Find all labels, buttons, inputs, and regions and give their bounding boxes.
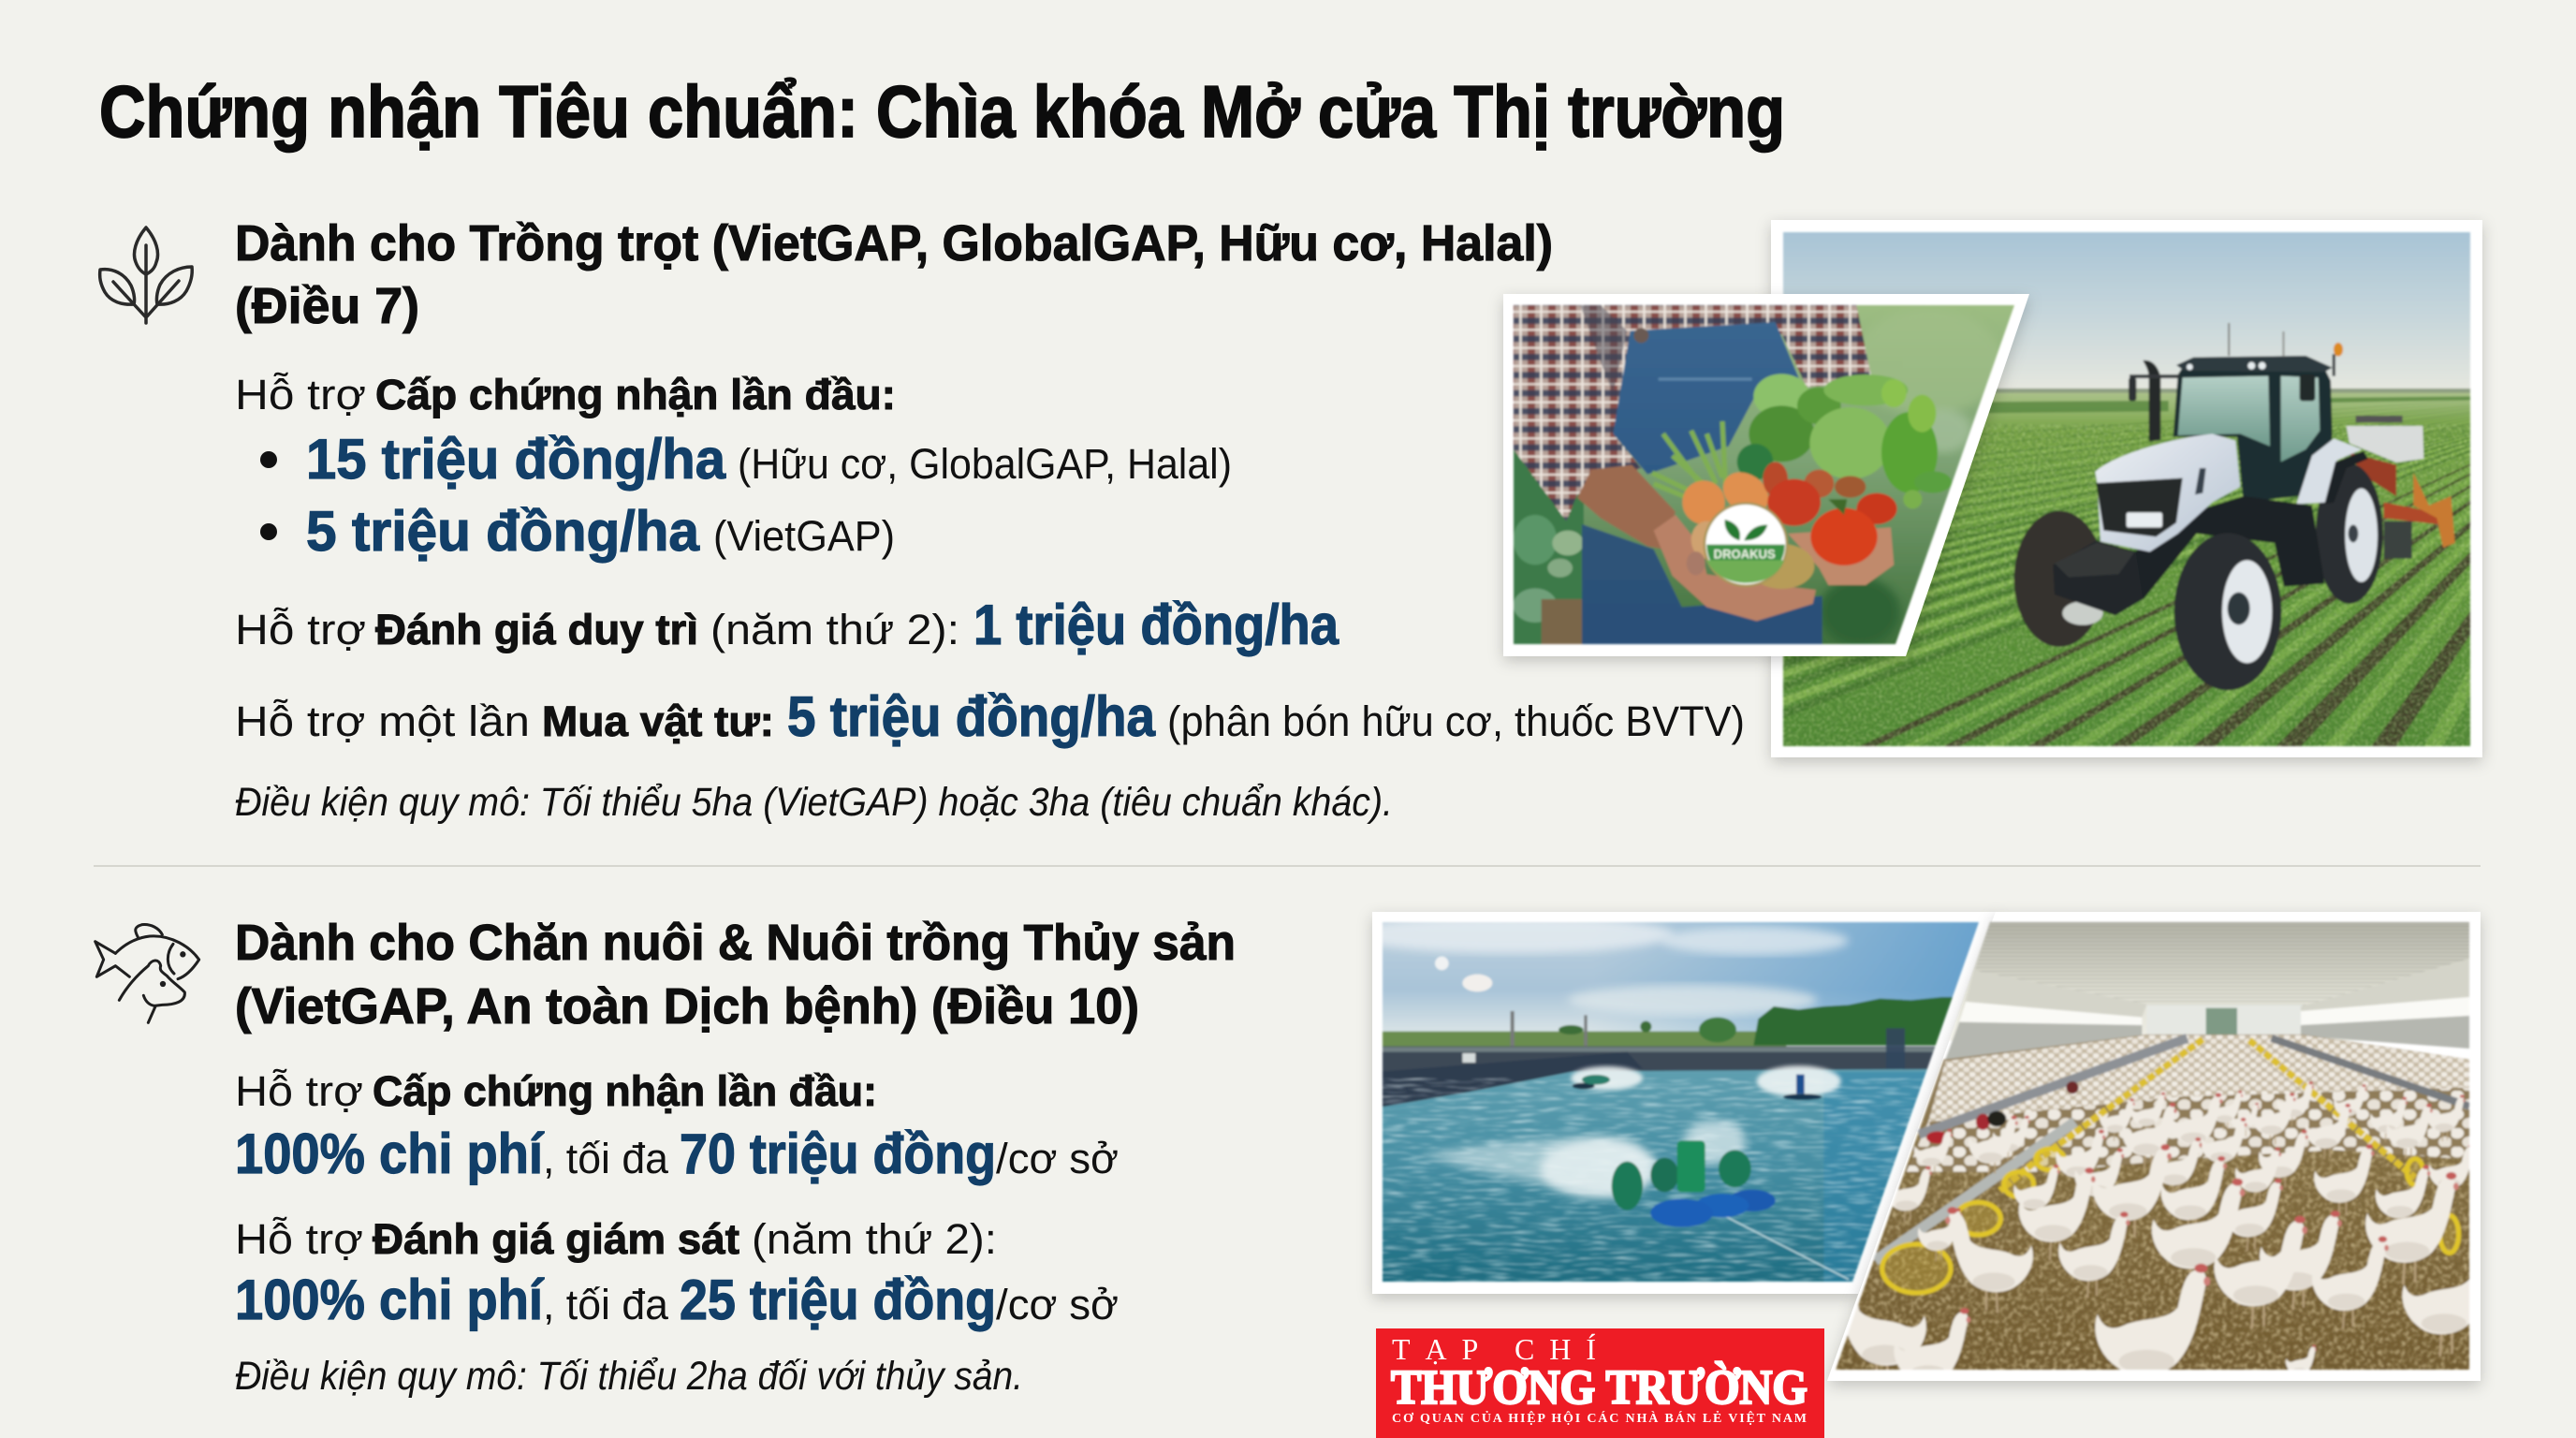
text: maintenance assessment support: 1 triệu đồng/ha xyxy=(973,594,1339,656)
text: first certification support: Hỗ trợ xyxy=(235,371,366,418)
bullet: 15 million per ha xyxy=(260,428,1232,491)
feeders xyxy=(1882,1149,2459,1293)
text: 100 percent up to 25 million: 100% chi phí xyxy=(235,1269,545,1331)
bullet: 15 million per ha: (Hữu cơ, GlobalGAP, Halal) xyxy=(738,440,1232,488)
heading: crop section: Dành cho Trồng trọt (VietGAP, GlobalGAP, Hữu cơ, Halal) xyxy=(235,215,1553,271)
organic badge xyxy=(1705,504,1787,586)
text: maintenance assessment support: Đánh giá duy trì xyxy=(375,606,698,653)
text: one-off materials support: (phân bón hữu cơ, thuốc BVTV) xyxy=(1167,697,1745,745)
text: monitoring assessment support: (năm thứ 2): xyxy=(752,1215,997,1263)
note: crop scale condition: Điều kiện quy mô: Tối thiểu 5ha (VietGAP) hoặc 3ha (tiêu chuẩn khác). xyxy=(235,780,1393,825)
text: 100 percent up to 25 million: 25 triệu đồng xyxy=(680,1269,996,1331)
text: maintenance assessment support: Hỗ trợ xyxy=(235,606,366,653)
divider xyxy=(94,865,2481,867)
photo: poultry barn with chickens xyxy=(1827,912,2496,1402)
chickens xyxy=(2231,1103,2259,1137)
text: 100 percent up to 70 million: , tối đa xyxy=(543,1135,669,1182)
heading: crop section xyxy=(235,215,1553,334)
text: one-off materials support: Hỗ trợ một lần xyxy=(235,697,530,745)
arm and hands xyxy=(1577,465,1676,550)
text: monitoring assessment support xyxy=(235,1215,997,1263)
panel: livestock and aquaculture xyxy=(95,915,1236,1399)
crop rows xyxy=(1783,405,2470,717)
logo: Tạp chí Thương Trường xyxy=(1376,1328,1824,1438)
heading: livestock section: (VietGAP, An toàn Dịch bệnh) (Điều 10) xyxy=(235,978,1139,1034)
icon: fish and dog xyxy=(95,925,199,1022)
heading: livestock section: Dành cho Chăn nuôi & Nuôi trồng Thủy sản xyxy=(235,915,1236,971)
text: one-off materials support xyxy=(235,685,1745,748)
heading: livestock section xyxy=(235,915,1236,1034)
text: 100 percent up to 25 million: , tối đa xyxy=(543,1281,669,1328)
bullet: 15 million per ha: 15 triệu đồng/ha xyxy=(306,428,726,491)
photo: aquaculture pond with aerators xyxy=(1350,912,1998,1294)
text: monitoring assessment support: Hỗ trợ xyxy=(235,1215,363,1263)
photo: tractor in field xyxy=(1771,220,2576,757)
text: monitoring assessment support: Đánh giá giám sát xyxy=(373,1215,739,1263)
text: 100 percent up to 70 million: 70 triệu đồng xyxy=(680,1123,996,1185)
text: first certification support: Hỗ trợ xyxy=(235,1067,363,1115)
text: maintenance assessment support xyxy=(235,594,1339,656)
organic badge: DROAKUS xyxy=(1714,547,1776,562)
logo: Tạp chí Thương Trường: CƠ QUAN CỦA HIỆP HỘI CÁC NHÀ BÁN LẺ VIỆT NAM xyxy=(1392,1410,1807,1426)
bullet: 5 million per ha: 5 triệu đồng/ha xyxy=(306,500,700,563)
title: Chứng nhận Tiêu chuẩn: Chìa khóa Mở cửa Thị trường xyxy=(99,70,1785,153)
text: 100 percent up to 70 million: 100% chi phí xyxy=(235,1123,545,1185)
note: aquaculture scale condition: Điều kiện quy mô: Tối thiểu 2ha đối với thủy sản. xyxy=(235,1354,1023,1399)
text: 100 percent up to 25 million: /cơ sở xyxy=(996,1281,1119,1328)
text: first certification support: Cấp chứng nhận lần đầu: xyxy=(373,1067,877,1115)
text: 100 percent up to 70 million: /cơ sở xyxy=(996,1135,1119,1182)
vegetables xyxy=(1752,373,1808,412)
panel: crop production xyxy=(100,215,1745,825)
logo: Tạp chí Thương Trường: TẠP CHÍ xyxy=(1392,1332,1596,1366)
logo: Tạp chí Thương Trường: THƯƠNG TRƯỜNG xyxy=(1391,1360,1808,1415)
photo: farmer holding vegetables xyxy=(1503,294,2029,656)
tractor xyxy=(2014,323,2455,690)
text: first certification support: Cấp chứng nhận lần đầu: xyxy=(375,371,896,418)
bullet: 5 million per ha xyxy=(260,500,895,563)
text: one-off materials support: Mua vật tư: xyxy=(542,697,774,745)
heading: crop section: (Điều 7) xyxy=(235,278,419,334)
bullet: 5 million per ha: (VietGAP) xyxy=(713,512,895,560)
icon: plant sprout xyxy=(100,227,192,323)
text: one-off materials support: 5 triệu đồng/ha xyxy=(787,685,1156,748)
foam and aerators xyxy=(1421,1137,1650,1196)
text: 100 percent up to 70 million xyxy=(235,1123,1119,1185)
text: maintenance assessment support: (năm thứ 2): xyxy=(710,606,959,653)
text: 100 percent up to 25 million xyxy=(235,1269,1119,1331)
